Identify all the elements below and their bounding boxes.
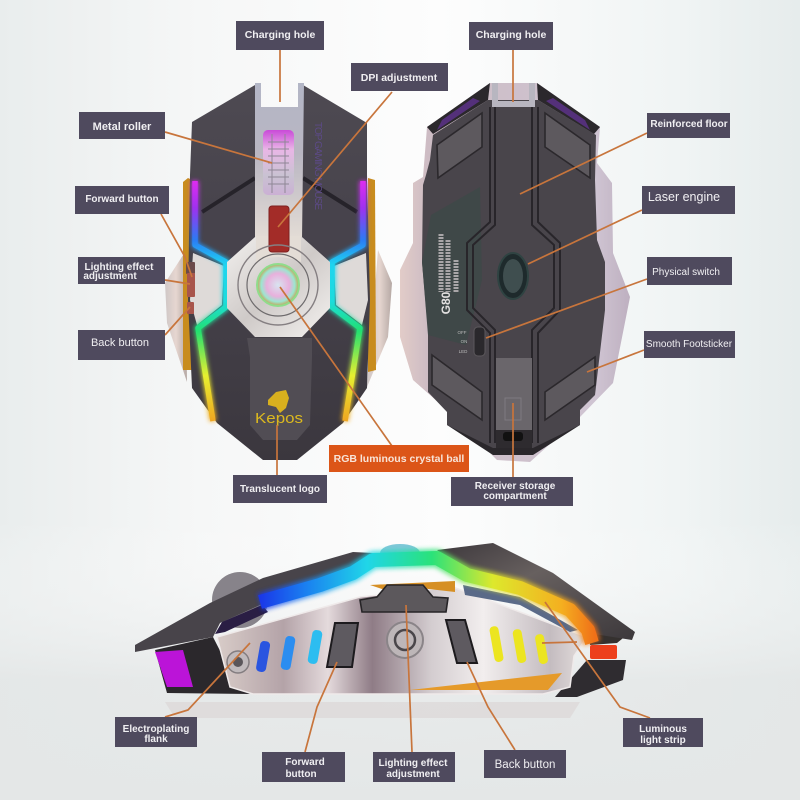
lower shell panel	[247, 338, 312, 440]
foot pads	[432, 113, 595, 420]
power switch	[458, 327, 485, 356]
center channel	[255, 83, 304, 240]
channel lower part	[256, 236, 301, 262]
label: Metal roller	[79, 112, 165, 139]
label: Reinforced floor	[647, 113, 730, 138]
lower left black body	[155, 637, 250, 694]
label: Charging hole left: Charging hole	[245, 29, 315, 41]
label: Charging hole right: Charging hole	[476, 29, 546, 41]
label: Back button	[78, 330, 165, 360]
lighting switch hump	[360, 585, 448, 612]
rings and crystal ball	[238, 245, 318, 325]
label: Reinforced floor: Reinforced floor	[650, 119, 728, 130]
orange side strips	[183, 178, 376, 372]
silver base	[400, 83, 630, 462]
lighting knob	[387, 622, 423, 658]
center hex plate	[227, 237, 330, 337]
top-view mouse	[165, 83, 392, 460]
label: Smooth Footsticker	[644, 331, 735, 358]
label: Forward button bottom: button	[285, 769, 317, 780]
silver flank plates	[190, 253, 368, 325]
G80 print: G80	[439, 291, 453, 314]
side silver wings	[165, 250, 392, 387]
label: DPI adjustment: DPI adjustment	[361, 72, 438, 84]
label: Laser engine	[642, 186, 735, 214]
RGB strip glow	[195, 181, 363, 421]
black lower wedge	[447, 408, 580, 455]
dark plate	[422, 100, 605, 448]
RGB strips	[195, 181, 363, 421]
upper right black body	[588, 622, 633, 645]
scroll wheel	[212, 572, 268, 628]
right shell	[437, 543, 635, 640]
label: Back button: Back button	[91, 337, 149, 349]
label: Electroplating flank: flank	[144, 734, 168, 745]
label: DPI adjustment	[351, 63, 448, 91]
label: Forward button bottom	[262, 752, 345, 782]
label: Forward button bottom: Forward	[285, 757, 325, 768]
bottom-view mouse	[400, 83, 630, 462]
label: Physical switch: Physical switch	[652, 267, 720, 278]
red LED	[590, 645, 617, 659]
label: Physical switch	[647, 257, 732, 285]
label: Metal roller: Metal roller	[93, 121, 152, 133]
charging posts	[492, 83, 535, 107]
metal roller	[263, 130, 294, 195]
label: Lighting effect adjustment	[78, 257, 165, 284]
chrome flank plate	[217, 587, 587, 694]
body shell	[188, 85, 370, 460]
left crease line	[202, 178, 255, 212]
purple corners	[437, 98, 590, 130]
right crease line	[303, 178, 357, 212]
label: Charging hole right	[469, 22, 553, 50]
Kepos logo: Kepos	[255, 410, 303, 427]
label: Lighting effect adjustment bottom: Lighting effect	[379, 758, 448, 769]
dark blue reflection	[463, 585, 578, 632]
label: Receiver storage compartment: compartment	[483, 491, 547, 502]
label: Lighting effect adjustment bottom: adjustment	[386, 769, 440, 780]
forward side button	[327, 623, 358, 667]
label: Electroplating flank	[115, 717, 197, 747]
orange under-band streak	[370, 581, 455, 592]
side buttons	[186, 262, 195, 314]
label: RGB luminous crystal ball	[329, 445, 469, 472]
label: Translucent logo: Translucent logo	[240, 484, 320, 495]
label: Lighting effect adjustment: Lighting effect	[85, 262, 154, 273]
green label area	[422, 187, 482, 345]
right button crease	[303, 178, 357, 262]
receiver compartment	[496, 358, 532, 448]
yellow vents	[489, 626, 549, 665]
crystal ball top	[380, 544, 420, 562]
label: Back button bottom	[484, 750, 566, 778]
label: Smooth Footsticker: Smooth Footsticker	[646, 339, 733, 350]
RGB band glow	[260, 558, 592, 643]
flank screw	[227, 651, 249, 673]
label: Electroplating flank: Electroplating	[123, 724, 189, 735]
label: Luminous light strip: light strip	[640, 735, 686, 746]
blue vents	[255, 629, 323, 673]
label: Lighting effect adjustment: adjustment	[83, 271, 137, 282]
label: Forward button: Forward button	[85, 194, 159, 205]
reflection	[165, 702, 580, 718]
label: Receiver storage compartment	[451, 477, 573, 506]
lower right black body	[555, 660, 626, 697]
power switch: ON	[461, 339, 467, 344]
label: Charging hole left	[236, 21, 324, 50]
label: Luminous light strip: Luminous	[639, 724, 687, 735]
label: Lighting effect adjustment bottom	[373, 752, 455, 782]
RGB band	[260, 558, 592, 643]
back side button	[446, 620, 477, 663]
Kepos logo	[255, 390, 303, 427]
orange streak	[410, 673, 562, 690]
leader lines	[161, 50, 650, 752]
side vertical print: TOP GAMING MOUSE	[312, 122, 323, 210]
left button crease	[202, 178, 255, 262]
label: Back button bottom: Back button	[495, 759, 555, 771]
side-view mouse	[135, 543, 635, 718]
G80 print	[439, 234, 456, 314]
DPI button	[269, 206, 289, 252]
label: Laser engine: Laser engine	[648, 190, 720, 204]
laser window	[498, 253, 528, 299]
label: Forward button	[75, 186, 169, 214]
dark purple gap	[215, 605, 268, 634]
magenta vent	[155, 650, 193, 687]
label: Translucent logo	[233, 475, 327, 503]
label: Luminous light strip	[623, 718, 703, 747]
label: Receiver storage compartment: Receiver storage	[475, 481, 556, 492]
black top wings	[427, 83, 600, 134]
left shell	[135, 552, 373, 652]
label: RGB luminous crystal ball: RGB luminous crystal ball	[334, 453, 464, 465]
power switch: LED	[459, 349, 468, 354]
floor channel lines	[467, 107, 560, 443]
power switch: OFF	[458, 330, 467, 335]
